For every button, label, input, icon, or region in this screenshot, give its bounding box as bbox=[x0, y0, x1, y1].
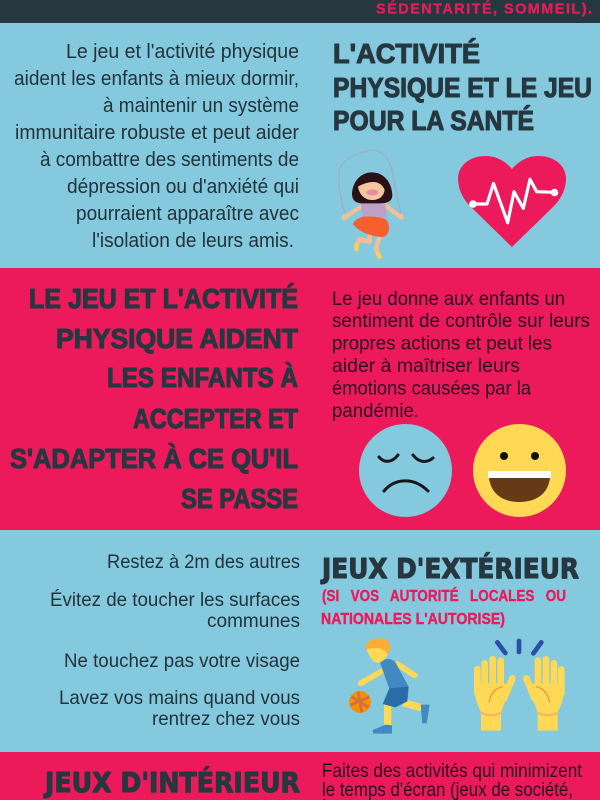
body text: indoor games bbox=[322, 760, 582, 800]
body text: emotions: pandémie. bbox=[332, 400, 419, 422]
heading: indoor games: JEUX D'INTÉRIEUR bbox=[43, 765, 300, 799]
body text: health benefits: aident les enfants à mieux dormir, bbox=[14, 68, 299, 90]
heading: emotions: ACCEPTER ET bbox=[133, 403, 298, 434]
panel: indoor games bbox=[0, 752, 600, 800]
body text: emotions bbox=[332, 288, 590, 422]
body text: health benefits: dépression ou d'anxiété qui bbox=[67, 176, 299, 198]
body text: health benefits: à combattre des sentiments de bbox=[40, 149, 299, 171]
body text: emotions: sentiment de contrôle sur leurs bbox=[332, 310, 590, 332]
banner text: SÉDENTARITÉ, SOMMEIL). bbox=[376, 0, 592, 18]
icon: heart with pulse bbox=[458, 156, 566, 247]
body text: emotions: Le jeu donne aux enfants un bbox=[332, 288, 565, 310]
body text: emotions: propres actions et peut les bbox=[332, 332, 552, 354]
heading: emotions: LES ENFANTS À bbox=[107, 362, 298, 393]
icon: raised hands bbox=[474, 641, 564, 731]
panel: emotions bbox=[0, 268, 600, 530]
heading: health: POUR LA SANTÉ bbox=[333, 105, 534, 136]
list: safety advice: Ne touchez pas votre visage bbox=[64, 650, 300, 672]
heading: health bbox=[333, 38, 592, 136]
body text: health benefits: pourraient apparaître avec bbox=[76, 203, 299, 225]
list: safety advice: Restez à 2m des autres bbox=[107, 551, 300, 573]
heading: emotions bbox=[10, 283, 298, 514]
panel: health bbox=[0, 23, 600, 268]
body text: health benefits: à maintenir un système bbox=[103, 95, 299, 117]
panel: outdoor games bbox=[0, 530, 600, 752]
heading: emotions: LE JEU ET L'ACTIVITÉ bbox=[29, 283, 298, 314]
list: safety advice: communes bbox=[207, 610, 300, 632]
icon: child dribbling a basketball bbox=[349, 638, 430, 734]
icon: sad face bbox=[359, 424, 452, 517]
list: safety advice bbox=[50, 551, 300, 730]
body text: emotions: aider à maîtriser leurs bbox=[332, 355, 520, 377]
body text: emotions: émotions causées par la bbox=[332, 378, 531, 400]
subheading: outdoor games bbox=[321, 586, 566, 628]
heading: emotions: S'ADAPTER À CE QU'IL bbox=[10, 443, 298, 474]
subheading: outdoor games: NATIONALES L'AUTORISE) bbox=[321, 611, 505, 628]
body text: health benefits: Le jeu et l'activité physique bbox=[66, 41, 299, 63]
body text: health benefits: immunitaire robuste et peut aider bbox=[15, 122, 299, 144]
icon: happy face bbox=[473, 424, 566, 517]
body text: health benefits bbox=[14, 41, 299, 252]
heading: emotions: PHYSIQUE AIDENT bbox=[56, 323, 298, 354]
heading: health: L'ACTIVITÉ bbox=[333, 38, 480, 69]
body text: health benefits: l'isolation de leurs amis. bbox=[92, 230, 294, 252]
heading: emotions: SE PASSE bbox=[181, 483, 298, 514]
panel: top banner bbox=[0, 0, 600, 23]
list: safety advice: Évitez de toucher les surfaces bbox=[50, 588, 300, 611]
icon: girl skipping rope bbox=[339, 150, 404, 259]
list: safety advice: rentrez chez vous bbox=[152, 708, 300, 730]
list: safety advice: Lavez vos mains quand vous bbox=[59, 687, 300, 709]
